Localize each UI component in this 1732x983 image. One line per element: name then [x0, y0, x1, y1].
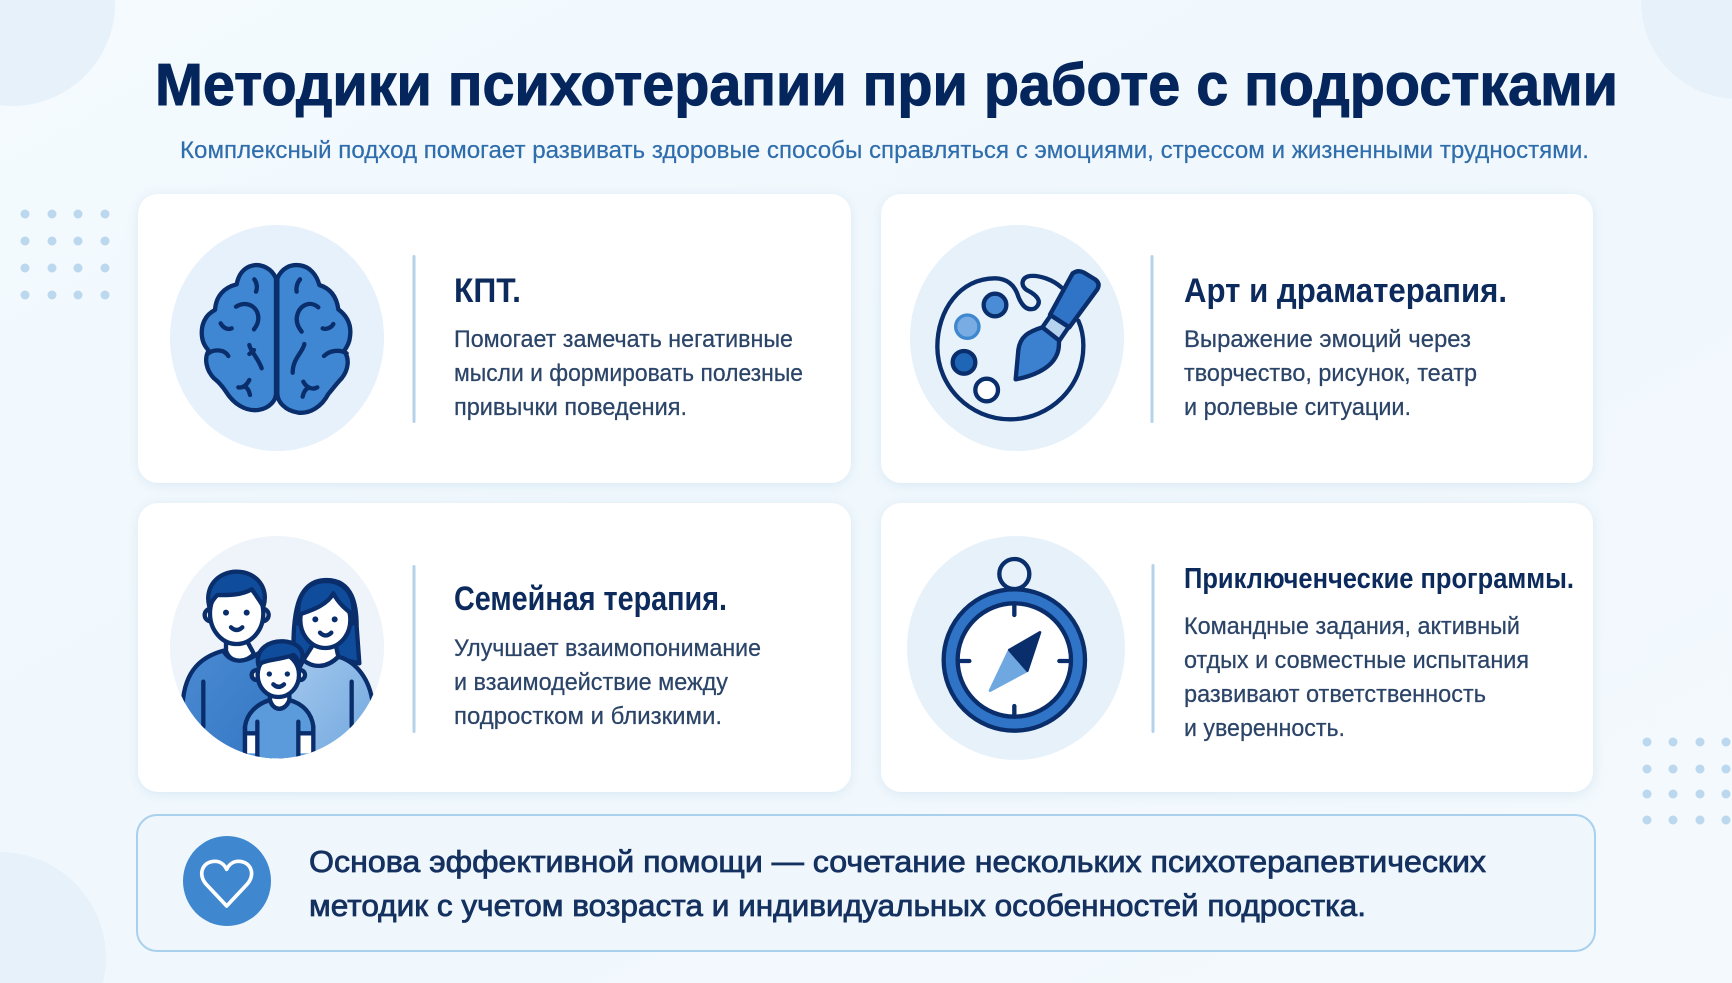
text: Арт description: и ролевые ситуации. — [1184, 394, 1411, 421]
icon: brain — [202, 265, 350, 413]
text: conclusion: Основа эффективной помощи — сочетание нескольких психотерапевтических — [309, 844, 1487, 879]
text: Семейная description: подростком и близкими. — [454, 703, 722, 730]
heading: Арт и драматерапия: Арт и драматерапия. — [1184, 272, 1507, 310]
text: Семейная description — [454, 635, 761, 730]
heading: Семейная терапия: Семейная терапия. — [454, 580, 727, 618]
text: Семейная description: и взаимодействие между — [454, 669, 729, 696]
text: Приключенческие description: развивают ответственность — [1184, 681, 1486, 708]
callout: conclusion — [137, 815, 1595, 951]
icon: family — [183, 572, 373, 767]
text: КПТ description: привычки поведения. — [454, 394, 687, 421]
text: КПТ description — [454, 326, 803, 421]
text: Приключенческие description: отдых и совместные испытания — [1184, 647, 1529, 674]
text: Арт description — [1184, 326, 1477, 421]
panel: Приключенческие программы — [881, 503, 1593, 792]
text: Арт description: творчество, рисунок, театр — [1184, 360, 1477, 387]
subtitle: Комплексный подход помогает развивать здоровые способы справляться с эмоциями, стрессом и жизненными трудностями. — [180, 137, 1589, 164]
title: Методики психотерапии при работе с подростками — [155, 52, 1618, 118]
text: Семейная description: Улучшает взаимопонимание — [454, 635, 761, 662]
text: Приключенческие description — [1184, 613, 1529, 742]
panel: КПТ — [138, 194, 851, 483]
text: conclusion — [309, 844, 1487, 923]
text: conclusion: методик с учетом возраста и индивидуальных особенностей подростка. — [309, 888, 1366, 923]
panel: Семейная терапия — [138, 503, 851, 792]
icon: heart — [183, 836, 271, 926]
text: КПТ description: Помогает замечать негативные — [454, 326, 793, 353]
text: Арт description: Выражение эмоций через — [1184, 326, 1471, 353]
text: Приключенческие description: Командные задания, активный — [1184, 613, 1520, 640]
heading: Приключенческие программы: Приключенческие программы. — [1184, 563, 1574, 595]
icon: compass — [944, 559, 1085, 731]
icon: palette and brush — [937, 271, 1099, 419]
heading: КПТ: КПТ. — [454, 272, 521, 310]
panel: Арт и драматерапия — [881, 194, 1593, 483]
text: Приключенческие description: и уверенность. — [1184, 715, 1345, 742]
text: КПТ description: мысли и формировать полезные — [454, 360, 803, 387]
